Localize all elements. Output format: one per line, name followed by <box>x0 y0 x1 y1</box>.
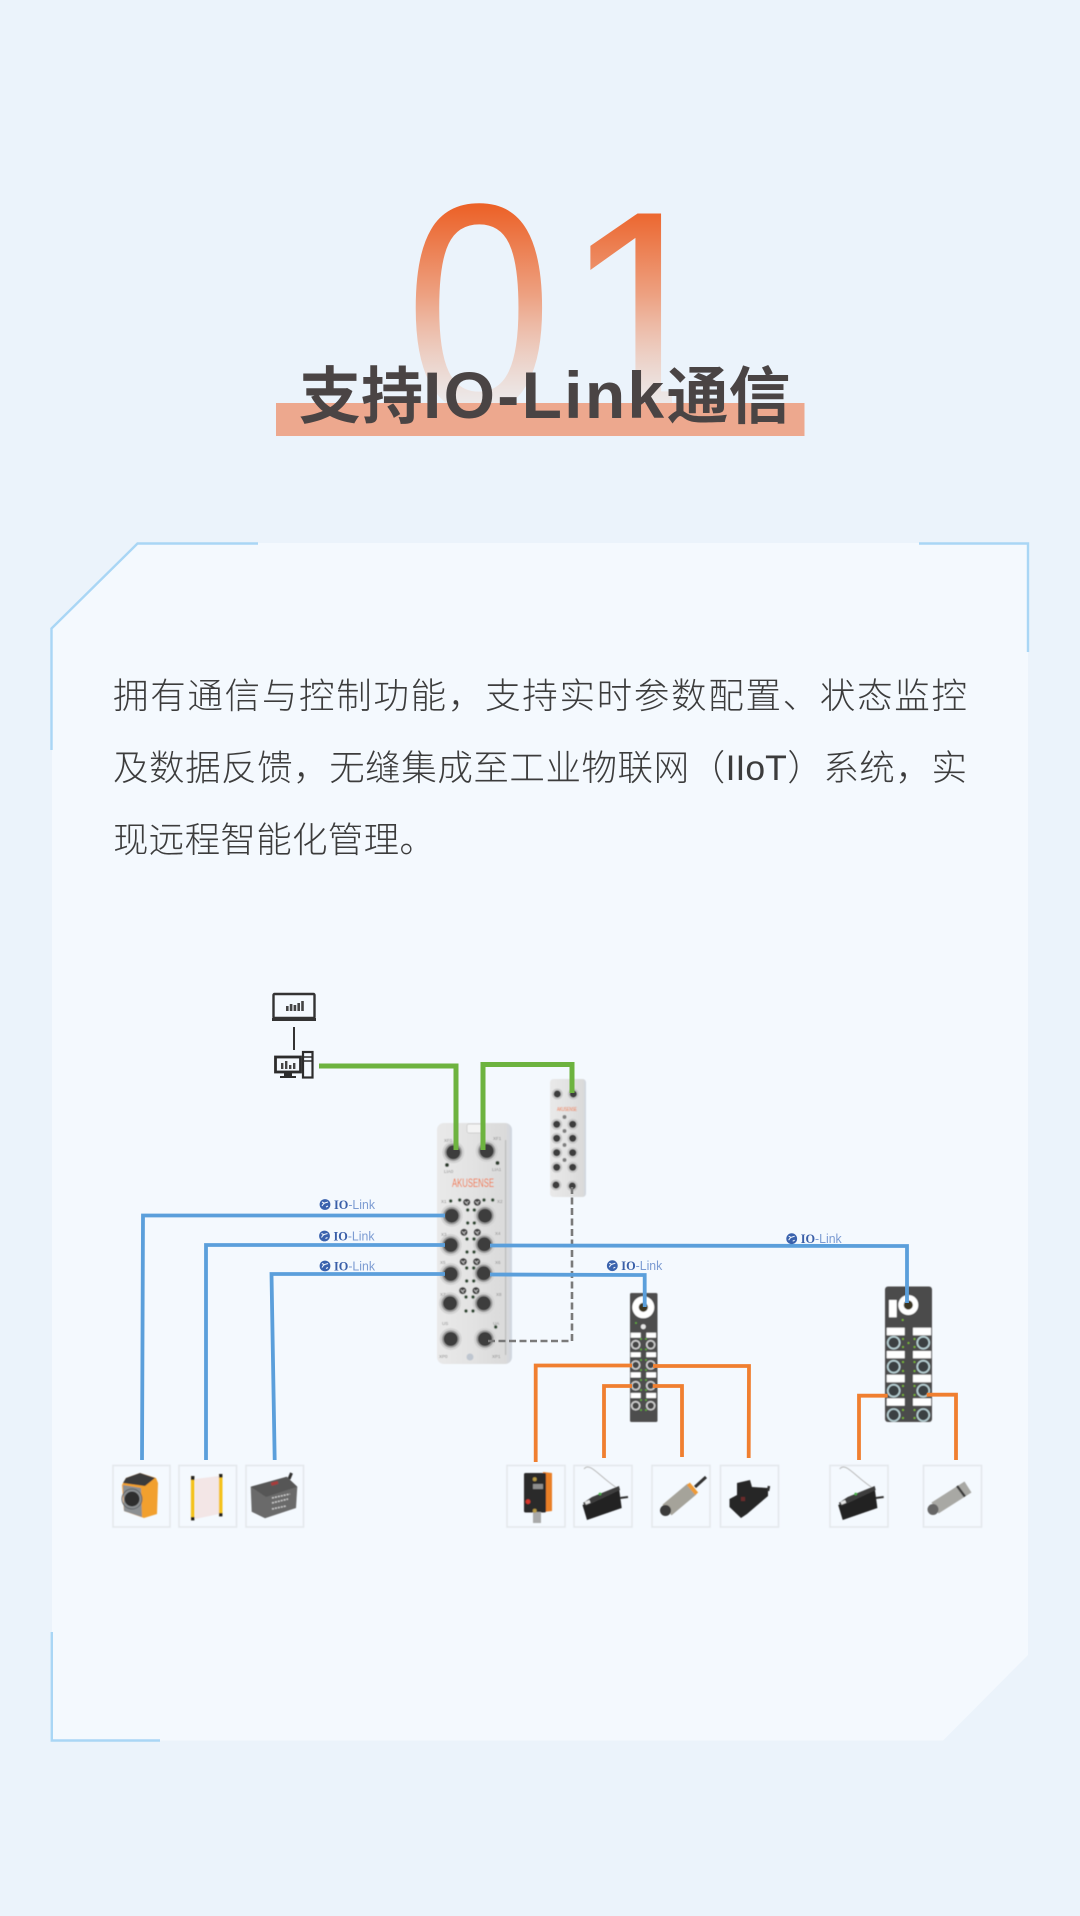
device: small expansion hub <box>550 1079 586 1197</box>
sensor: cylindrical proximity with orange ring <box>652 1466 710 1527</box>
sensor: gray photoelectric box <box>246 1466 304 1527</box>
IO-Link tag 1: IO-Link <box>334 1197 375 1212</box>
sensor: fiber amplifier 2 <box>830 1466 888 1527</box>
sensor: vision camera <box>113 1466 170 1527</box>
icon: desktop computer <box>276 1052 312 1078</box>
device: IO-Link module A <box>630 1293 658 1422</box>
device: main AKUSENSE hub: X2 <box>497 1199 503 1204</box>
device: main AKUSENSE hub: UA <box>493 1321 499 1326</box>
device: main AKUSENSE hub: X3 <box>441 1232 447 1237</box>
device: main AKUSENSE hub: XF1 <box>493 1136 502 1141</box>
device: main AKUSENSE hub: X4 <box>495 1231 501 1236</box>
heading: 支持IO-Link通信 <box>299 358 790 432</box>
device: main AKUSENSE hub: X6 <box>495 1260 501 1265</box>
diagram and decoration canvas <box>50 203 1030 1742</box>
IO-Link tag 2: IO-Link <box>334 1228 375 1244</box>
connector: laptop to desktop <box>293 1027 295 1050</box>
big number 01: 0 <box>405 143 552 473</box>
device: main AKUSENSE hub: XP0 <box>439 1354 448 1359</box>
device: main AKUSENSE hub: X8 <box>496 1292 502 1297</box>
big number 01 <box>416 203 672 403</box>
sensor: fork slot sensor <box>720 1466 778 1527</box>
IO-Link tag 3: IO-Link <box>334 1258 375 1274</box>
sensor: orange-backed photoelectric <box>507 1466 565 1527</box>
device: main AKUSENSE hub: LIA0 <box>444 1169 454 1174</box>
title highlight bar <box>276 403 804 436</box>
device: main AKUSENSE hub <box>437 1123 512 1364</box>
description text: 拥有通信与控制功能，支持实时参数配置、状态监控 <box>113 676 967 716</box>
icon: laptop with chart <box>272 994 316 1021</box>
device: IO-Link module B <box>885 1286 932 1422</box>
device: small expansion hub: AKUSENSE <box>557 1107 577 1113</box>
description text: 及数据反馈，无缝集成至工业物联网（IIoT）系统，实 <box>113 748 967 788</box>
panel corner line: top left <box>52 544 258 750</box>
device: main AKUSENSE hub: LIA1 <box>492 1167 502 1172</box>
IO-Link tag 4: IO-Link <box>801 1231 842 1246</box>
sensor: cylindrical proximity <box>924 1466 982 1527</box>
sensor: light curtain <box>179 1466 236 1527</box>
device: main AKUSENSE hub: XF0 <box>444 1138 453 1143</box>
blue IO-Link cables <box>142 1216 907 1460</box>
device: main AKUSENSE hub: XP1 <box>492 1354 501 1359</box>
description text: 现远程智能化管理。 <box>113 820 435 860</box>
content panel <box>52 543 1028 1740</box>
network diagram <box>113 994 982 1527</box>
device: main AKUSENSE hub: AKUSENSE <box>452 1178 494 1190</box>
panel corner line: bottom left <box>52 1632 160 1740</box>
green ethernet cables <box>319 1064 572 1150</box>
orange sensor cables <box>536 1366 956 1462</box>
IO-Link tag 5: IO-Link <box>621 1258 663 1273</box>
device: main AKUSENSE hub: X1 <box>441 1199 447 1204</box>
panel corner line: top right <box>919 544 1028 652</box>
device: main AKUSENSE hub: US <box>442 1321 448 1326</box>
dashed power cable <box>488 1187 572 1341</box>
big number 01: 1 <box>562 151 724 475</box>
device: main AKUSENSE hub: X7 <box>440 1292 446 1297</box>
device: main AKUSENSE hub: X5 <box>440 1260 446 1265</box>
description text <box>113 676 967 860</box>
sensor: fiber amplifier <box>574 1466 632 1527</box>
